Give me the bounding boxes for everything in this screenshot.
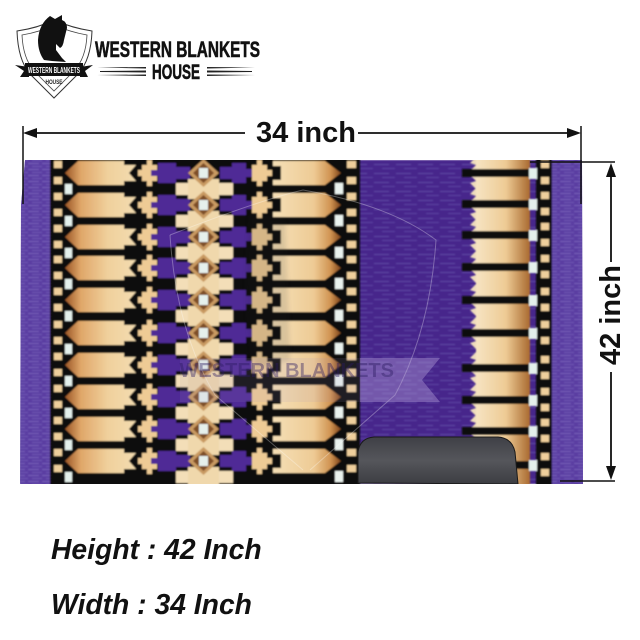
logo small word: HOUSE	[46, 80, 62, 86]
right woven panel	[462, 157, 552, 486]
logo wordmark: WESTERN BLANKETS	[95, 37, 260, 62]
logo word house: HOUSE	[152, 61, 200, 84]
logo	[15, 15, 260, 98]
watermark: WESTERN BLANKETS	[180, 360, 394, 382]
blanket pattern	[20, 157, 584, 487]
blanket	[20, 157, 584, 487]
logo ribbon: WESTERN BLANKETS	[28, 66, 80, 75]
left woven panel	[50, 158, 360, 487]
watermark	[170, 190, 440, 470]
height arrow	[610, 172, 612, 472]
extension lines	[23, 126, 581, 204]
text: height spec: Height : 42 Inch	[51, 533, 262, 565]
leather wear tab	[358, 437, 518, 484]
icon: horse head	[38, 15, 67, 62]
dimension: width	[23, 117, 581, 204]
logo shield emblem	[15, 15, 93, 98]
text: width spec: Width : 34 Inch	[51, 588, 252, 620]
side bands	[20, 158, 52, 486]
logo lines	[97, 67, 255, 76]
extension lines	[530, 162, 615, 481]
width label: 34 inch	[256, 117, 356, 149]
width arrow	[32, 132, 572, 134]
height label: 42 inch	[595, 265, 627, 365]
dimension: height	[530, 162, 627, 481]
blanket base	[20, 160, 583, 484]
